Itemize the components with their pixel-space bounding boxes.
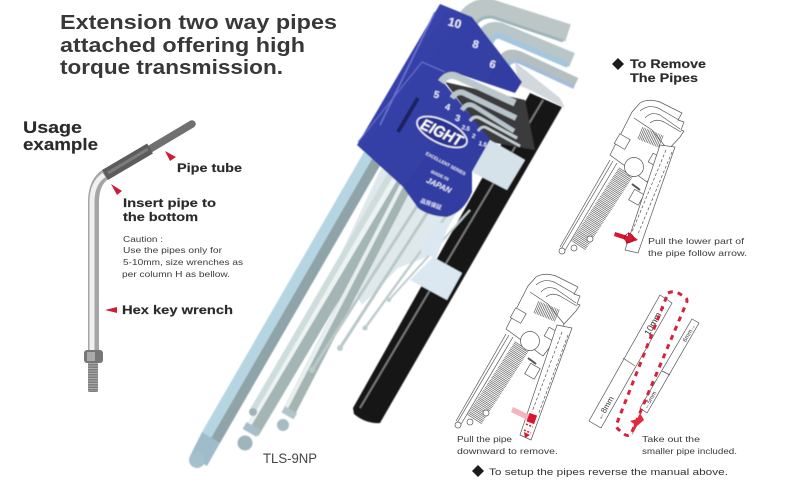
size numbers: 2.5 — [461, 125, 471, 133]
heading: to remove the pipes: To Remove — [630, 59, 706, 71]
size numbers: 6 — [488, 58, 497, 72]
caption: pull the pipe downward: Pull the pipe — [457, 434, 512, 444]
lower clip — [410, 222, 462, 300]
caption: take out the smaller pipe — [642, 434, 737, 456]
excellent series seal: 品質保証 — [419, 196, 443, 212]
caption: take out the smaller pipe: smaller pipe included. — [642, 446, 737, 456]
footer note: To setup the pipes reverse the manual above. — [489, 467, 728, 478]
red pointer: hex key wrench — [105, 307, 117, 313]
excellent series seal — [419, 151, 467, 212]
pipe tube — [105, 124, 192, 175]
red pointer: insert pipe — [111, 184, 122, 195]
dark recess behind short keys — [445, 82, 535, 150]
size numbers: 8 — [471, 38, 480, 52]
upper clip — [472, 140, 525, 190]
long arm keys — [238, 145, 470, 450]
caption: pull the lower part — [648, 236, 747, 258]
smaller pipe — [640, 319, 699, 413]
title: attached offering high — [60, 34, 305, 57]
excellent series seal: MADE IN — [430, 169, 449, 182]
caption: take out the smaller pipe: Take out the — [642, 434, 700, 444]
caution note: Caution : — [123, 234, 163, 244]
red arrow — [511, 407, 537, 438]
diamond bullet — [612, 58, 624, 70]
size numbers: 2 — [471, 134, 477, 140]
step diagram: separated pipes — [589, 292, 699, 436]
pipe outline — [625, 145, 675, 253]
red star marker — [630, 413, 644, 435]
step diagram: pull lower part — [559, 100, 684, 254]
upper short arm: 8 — [480, 29, 572, 65]
EIGHT logo: EIGHT — [418, 116, 466, 151]
caution note: per column H as bellow. — [122, 269, 230, 279]
heading: usage example — [23, 119, 98, 154]
size numbers — [432, 14, 497, 149]
caution note — [122, 234, 243, 279]
heading: usage example: example — [23, 136, 98, 154]
pipe outline — [520, 325, 572, 440]
silver holder — [515, 62, 565, 108]
black pipe — [353, 93, 562, 423]
size numbers: 4 — [444, 101, 451, 112]
heading: to remove the pipes — [612, 58, 706, 85]
caption: pull the pipe downward: downward to remove. — [457, 446, 558, 456]
footer note — [472, 465, 728, 478]
threaded bolt end — [84, 350, 103, 392]
largest key shaft — [189, 145, 392, 468]
smaller pipe: ←5mm — [643, 391, 658, 410]
small key arms over plate — [441, 75, 520, 146]
title — [60, 11, 337, 79]
upper short arm: 10 — [462, 8, 568, 41]
caution note: 5-10mm, size wrenches as — [123, 257, 243, 267]
label: insert pipe to the bottom — [123, 198, 216, 224]
larger pipe: ←8mm — [595, 395, 616, 422]
caption: pull the lower part: Pull the lower part of — [648, 236, 745, 246]
excellent series seal: EXCELLENT SERIES — [425, 151, 467, 176]
caption: pull the lower part: the pipe follow arrow. — [648, 248, 747, 258]
model label: TLS-9NP — [263, 451, 317, 466]
caution note: Use the pipes only for — [123, 245, 222, 255]
size numbers: 10 — [446, 14, 463, 32]
label: pipe tube: Pipe tube — [177, 163, 242, 175]
heading: usage example: Usage — [23, 119, 82, 137]
label: insert pipe to the bottom: the bottom — [123, 212, 198, 224]
label: insert pipe to the bottom: Insert pipe to — [123, 198, 216, 210]
size numbers: 5 — [432, 89, 441, 102]
larger pipe: 10mm→ — [642, 303, 668, 337]
blue holder plate — [357, 4, 522, 217]
title: Extension two way pipes — [60, 11, 337, 34]
red arrow — [614, 232, 638, 244]
excellent series seal: JAPAN — [425, 176, 453, 195]
usage wrench illustration — [84, 124, 192, 392]
label: hex key wrench: Hex key wrench — [122, 305, 233, 317]
red pointer: pipe tube — [165, 151, 176, 161]
red dashed loop — [616, 292, 687, 436]
larger pipe — [589, 295, 672, 428]
hex key wrench shaft — [94, 174, 106, 352]
upper short arm: 6 — [500, 55, 576, 87]
caption: pull the pipe downward — [457, 434, 558, 456]
size numbers: 3 — [454, 112, 461, 123]
step diagram: pull pipe downward — [455, 274, 580, 440]
diamond bullet — [472, 465, 484, 477]
size numbers: 1.5 — [478, 141, 488, 149]
product photo: hex key set — [189, 4, 576, 468]
smaller pipe: 6mm→ — [682, 324, 697, 343]
title: torque transmission. — [60, 56, 283, 79]
heading: to remove the pipes: The Pipes — [630, 73, 698, 85]
